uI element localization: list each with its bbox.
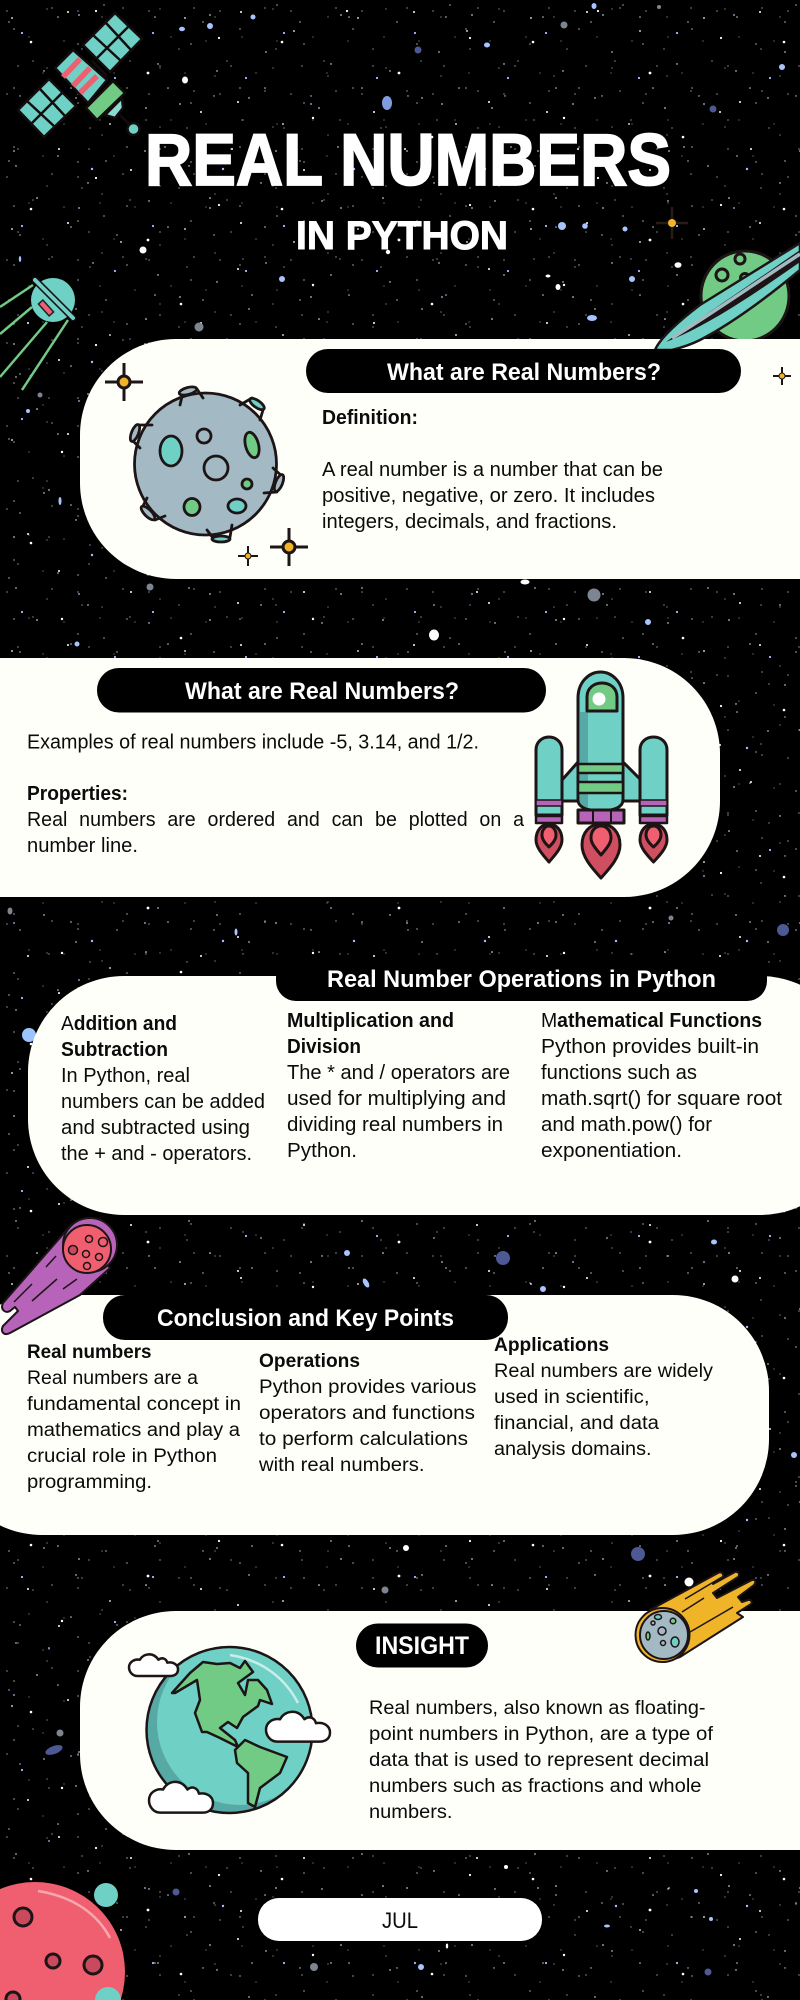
text: examples and properties: number line. xyxy=(27,835,138,857)
column: multiplication and division: Division xyxy=(287,1036,361,1058)
panel: what are real numbers, definition xyxy=(80,339,800,579)
icon: earth with clouds xyxy=(129,1639,330,1813)
text: examples and properties: Properties: xyxy=(27,783,128,805)
column: operations: Operations xyxy=(259,1351,360,1372)
column: multiplication and division: Multiplication and xyxy=(287,1010,454,1032)
column: real numbers: fundamental concept in xyxy=(27,1394,241,1415)
column: mathematical functions: functions such as xyxy=(541,1062,697,1084)
text: insight paragraph: numbers. xyxy=(369,1802,452,1823)
column: operations: operators and functions xyxy=(259,1403,475,1424)
column: mathematical functions: Python provides built-in xyxy=(541,1036,759,1058)
column: mathematical functions: math.sqrt() for square root xyxy=(541,1088,782,1110)
icon: ringed planet xyxy=(701,251,789,341)
column: addition and subtraction: and subtracted using xyxy=(61,1117,250,1139)
column: multiplication and division: used for multiplying and xyxy=(287,1088,506,1110)
icon: planet ring xyxy=(655,243,800,350)
column: addition and subtraction: numbers can be added xyxy=(61,1091,265,1113)
column: real numbers: mathematics and play a xyxy=(27,1420,240,1441)
column: multiplication and division: dividing real numbers in xyxy=(287,1114,503,1136)
column: real numbers: crucial role in Python xyxy=(27,1446,217,1467)
icon: rocket xyxy=(536,672,667,878)
heading: what are real numbers, first panel xyxy=(306,349,741,393)
icon: sparkle stars xyxy=(105,363,791,566)
text: definition: positive, negative, or zero. It includes xyxy=(322,485,655,507)
column: addition and subtraction xyxy=(61,1013,265,1165)
heading: real number operations in python xyxy=(276,957,767,1001)
column: mathematical functions: exponentiation. xyxy=(541,1140,682,1162)
title: real numbers: REAL NUMBERS xyxy=(145,120,671,201)
icon: yellow comet xyxy=(636,1572,755,1662)
heading: what are real numbers, first panel: What are Real Numbers? xyxy=(387,359,661,386)
column: addition and subtraction: Addition and xyxy=(61,1013,177,1035)
column: addition and subtraction: Subtraction xyxy=(61,1039,168,1061)
text: insight paragraph xyxy=(369,1698,714,1823)
text: examples and properties: Examples of real numbers include -5, 3.14, and 1/2. xyxy=(27,732,479,754)
heading: what are real numbers: What are Real Numbers? xyxy=(185,678,459,705)
column: multiplication and division xyxy=(287,1010,510,1162)
column: operations: to perform calculations xyxy=(259,1429,468,1450)
panel: conclusion and key points xyxy=(0,1295,769,1535)
column: multiplication and division: Python. xyxy=(287,1140,357,1162)
icon: red planet with moons xyxy=(0,1882,125,2000)
column: applications: analysis domains. xyxy=(494,1439,652,1460)
text: definition xyxy=(322,407,663,533)
panel: insight xyxy=(80,1572,800,1850)
column: applications: financial, and data xyxy=(494,1413,659,1434)
subtitle: in python: IN PYTHON xyxy=(296,214,508,258)
column: operations: with real numbers. xyxy=(258,1455,424,1476)
text: insight paragraph: point numbers in Python, are a type of xyxy=(369,1724,714,1745)
footer label: JUL xyxy=(258,1898,542,1941)
heading: insight xyxy=(356,1624,488,1668)
column: mathematical functions: and math.pow() for xyxy=(541,1114,712,1136)
column: multiplication and division: The * and / operators are xyxy=(287,1062,510,1084)
column: addition and subtraction: the + and - operators. xyxy=(61,1143,252,1165)
text: insight paragraph: Real numbers, also known as floating- xyxy=(369,1698,706,1719)
text: examples and properties: Real numbers are ordered and can be plotted on a xyxy=(27,809,525,831)
heading: what are real numbers xyxy=(97,668,546,712)
icon: purple comet xyxy=(2,1218,117,1334)
column: operations: Python provides various xyxy=(259,1377,476,1398)
column: real numbers xyxy=(27,1342,241,1493)
column: applications: used in scientific, xyxy=(494,1387,650,1408)
decoration: orange sparkle star xyxy=(656,207,688,239)
panel: examples and properties xyxy=(0,658,720,897)
footer label: JUL: JUL xyxy=(382,1908,418,1933)
panel: real number operations xyxy=(28,957,800,1215)
text: definition: Definition: xyxy=(322,407,418,429)
icon: satellite xyxy=(18,13,142,137)
column: real numbers: Real numbers are a xyxy=(27,1368,198,1389)
column: real numbers: Real numbers xyxy=(27,1342,152,1363)
column: applications: Real numbers are widely xyxy=(494,1361,714,1382)
column: real numbers: programming. xyxy=(27,1472,152,1493)
heading: conclusion and key points: Conclusion and Key Points xyxy=(157,1305,454,1332)
heading: conclusion and key points xyxy=(103,1295,508,1340)
column: applications xyxy=(494,1335,714,1460)
text: examples and properties xyxy=(27,732,525,857)
text: insight paragraph: numbers such as fractions and whole xyxy=(369,1776,702,1797)
heading: real number operations in python: Real Number Operations in Python xyxy=(327,966,716,993)
icon: cratered asteroid xyxy=(128,385,286,542)
text: insight paragraph: data that is used to represent decimal xyxy=(369,1750,709,1771)
text: definition: integers, decimals, and fractions. xyxy=(322,511,617,533)
heading: insight: INSIGHT xyxy=(375,1632,469,1660)
text: definition: A real number is a number that can be xyxy=(322,459,663,481)
column: addition and subtraction: In Python, real xyxy=(61,1065,190,1087)
column: mathematical functions: Mathematical Functions xyxy=(541,1010,762,1032)
column: mathematical functions xyxy=(541,1010,782,1162)
icon: sputnik probe xyxy=(0,278,75,390)
column: applications: Applications xyxy=(494,1335,609,1356)
column: operations xyxy=(258,1351,476,1476)
